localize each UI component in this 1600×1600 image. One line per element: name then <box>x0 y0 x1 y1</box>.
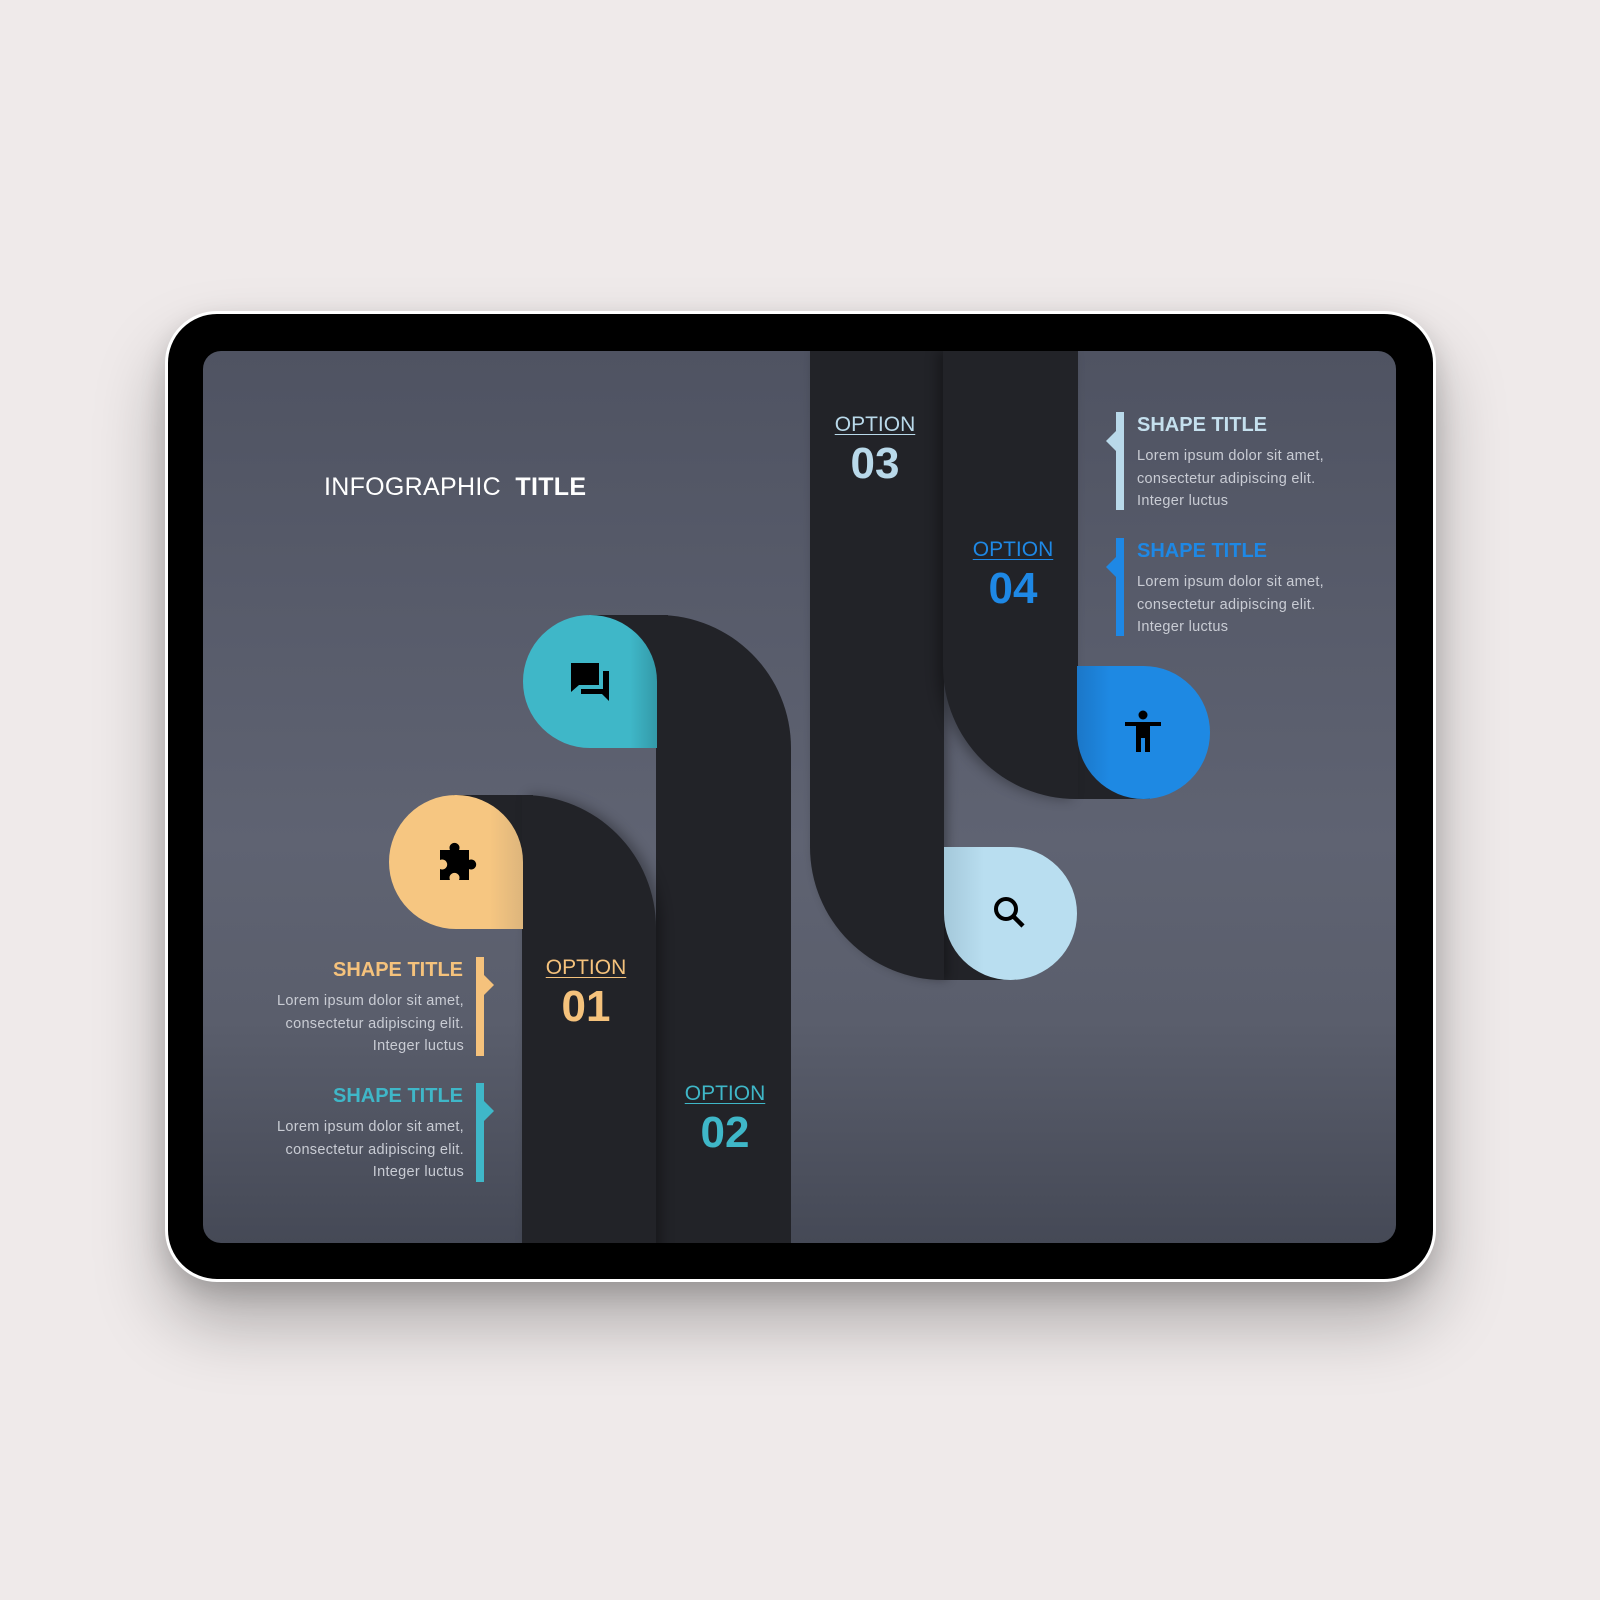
column 02 <box>588 615 791 1243</box>
text block: right 2: consectetur adipiscing elit. <box>1137 596 1315 612</box>
text block: left 1: SHAPE TITLE <box>333 959 463 981</box>
text block: left 2: Integer luctus <box>373 1164 464 1180</box>
text block: left 1: consectetur adipiscing elit. <box>286 1016 464 1032</box>
text block: right 1: consectetur adipiscing elit. <box>1137 470 1315 486</box>
option 04 <box>972 538 1054 613</box>
option 04: OPTION <box>973 538 1053 561</box>
text block: left 1: Lorem ipsum dolor sit amet, <box>277 993 464 1009</box>
text block: right 1 <box>1106 412 1324 510</box>
column 03 <box>810 351 1016 983</box>
bubble: accessibility <box>1077 666 1210 799</box>
option 02: 02 <box>701 1108 749 1157</box>
bubble: chat <box>523 615 657 748</box>
option 03: OPTION <box>835 413 915 436</box>
text block: right 1: Integer luctus <box>1137 493 1228 509</box>
option 02: OPTION <box>685 1082 765 1105</box>
text block: right 1: Lorem ipsum dolor sit amet, <box>1137 448 1324 464</box>
title: INFOGRAPHIC TITLE <box>324 473 586 501</box>
text block: right 2: Integer luctus <box>1137 619 1228 635</box>
screen <box>203 351 1396 1243</box>
bubble: search <box>944 847 1077 980</box>
device frame <box>165 311 1436 1282</box>
text block: left 1: Integer luctus <box>373 1038 464 1054</box>
option 03 <box>834 413 916 488</box>
text block: left 2 <box>277 1083 494 1182</box>
option 01: 01 <box>562 982 610 1031</box>
option 03: 03 <box>851 439 899 488</box>
column 04 <box>940 351 1150 802</box>
text block: left 2: consectetur adipiscing elit. <box>286 1142 464 1158</box>
option 02 <box>684 1082 766 1157</box>
text block: right 2: SHAPE TITLE <box>1137 540 1267 562</box>
text block: left 2: Lorem ipsum dolor sit amet, <box>277 1119 464 1135</box>
column 01 <box>453 792 660 1243</box>
option 01: OPTION <box>546 956 626 979</box>
option 04: 04 <box>989 564 1037 613</box>
text block: right 1: SHAPE TITLE <box>1137 414 1267 436</box>
bubble: puzzle <box>389 795 523 929</box>
option 01 <box>546 956 626 1031</box>
text block: left 1 <box>277 957 494 1056</box>
text block: right 2: Lorem ipsum dolor sit amet, <box>1137 574 1324 590</box>
text block: right 2 <box>1106 538 1324 636</box>
text block: left 2: SHAPE TITLE <box>333 1085 463 1107</box>
